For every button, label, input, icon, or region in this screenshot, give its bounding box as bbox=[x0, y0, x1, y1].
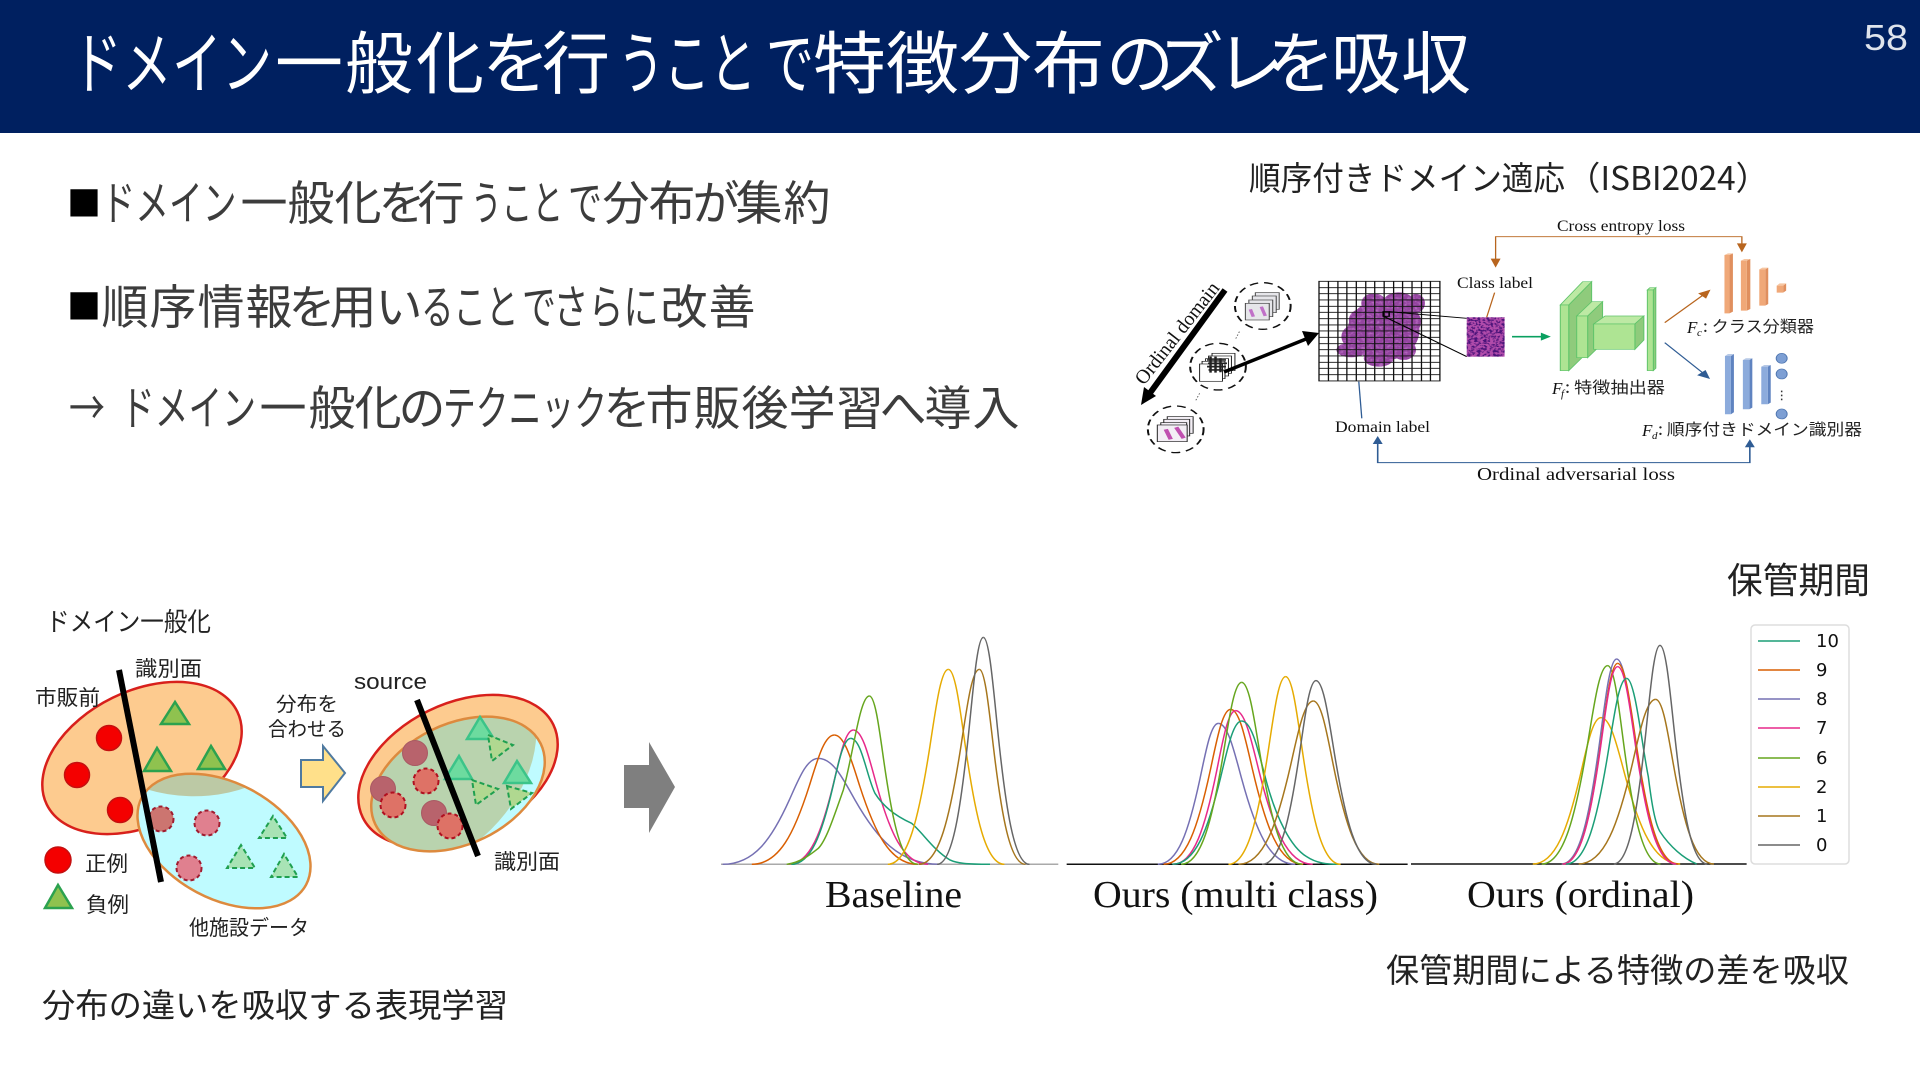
chart: Ours (ordinal) bbox=[1411, 645, 1747, 864]
diagram labels bbox=[1335, 218, 1862, 484]
bullet 2: 改善 bbox=[660, 269, 756, 338]
ordinal domain arrow: Ordinal domain bbox=[1131, 278, 1224, 389]
diagram labels: d bbox=[1652, 430, 1658, 442]
diagram labels: Cross entropy loss bbox=[1557, 218, 1685, 235]
tissue grid with patch bbox=[1319, 281, 1505, 381]
align-distributions label: 分布を bbox=[276, 688, 338, 717]
title: で bbox=[766, 9, 814, 108]
chart legend: 6 bbox=[1816, 748, 1827, 769]
after: aligned distributions bbox=[357, 694, 559, 853]
after: distribution cluster bbox=[357, 694, 559, 858]
legend: negative bbox=[45, 885, 129, 919]
chart legend: 8 bbox=[1816, 689, 1827, 710]
chart legend: 1 bbox=[1816, 806, 1827, 827]
before: labels: 市販前 bbox=[35, 682, 100, 712]
slide stacks in dashed circles bbox=[1148, 283, 1291, 453]
bullet 1: で bbox=[568, 165, 602, 234]
align-distributions label bbox=[268, 688, 346, 742]
bullet 3: 一般化の bbox=[260, 370, 446, 439]
chart label: Ours (ordinal): Ours (ordinal) bbox=[1467, 874, 1694, 916]
title: ズレを bbox=[1156, 9, 1335, 108]
after: boundary label: 識別面 bbox=[494, 846, 560, 876]
class classifier arrow and bars bbox=[1665, 253, 1786, 323]
diagram heading: （ISBI2024） bbox=[1567, 152, 1769, 200]
diagram labels: f bbox=[1561, 388, 1566, 400]
bullet 2: さらに bbox=[554, 269, 658, 338]
diagram heading: 順序付きドメイン適応 bbox=[1249, 152, 1565, 200]
bullet 2: ■ bbox=[67, 280, 101, 329]
legend: positive bbox=[45, 847, 128, 878]
diagram labels: c bbox=[1697, 327, 1702, 339]
after: decision boundary bbox=[417, 700, 478, 856]
title: の bbox=[1106, 9, 1174, 108]
chart: Ours (multi class) bbox=[1067, 677, 1408, 864]
title: 特徴分布 bbox=[813, 9, 1105, 108]
legend heading: storage period: 保管期間 bbox=[1727, 552, 1870, 604]
title: ドメイン bbox=[72, 9, 272, 108]
diagram labels: F bbox=[1641, 421, 1653, 440]
title: 一般化を行 bbox=[275, 9, 610, 108]
block arrow bbox=[301, 746, 345, 801]
bullet 2: で bbox=[522, 269, 556, 338]
feature extractor bbox=[1512, 282, 1656, 371]
bullet 3: テクニック bbox=[443, 370, 607, 439]
legend: positive: 正例 bbox=[85, 848, 128, 878]
chart: Baseline bbox=[721, 637, 1058, 864]
legend: negative: 負例 bbox=[86, 889, 129, 919]
chart legend: 10 bbox=[1816, 631, 1839, 652]
chart legend: 0 bbox=[1816, 835, 1827, 856]
caption: representation learning: 分布の違いを吸収する表現学習 bbox=[42, 979, 508, 1027]
bullet 3: ドメイン bbox=[121, 370, 256, 439]
bullet 2: 順序情報を用い bbox=[102, 269, 422, 338]
title: うこと bbox=[618, 9, 756, 108]
diagram heading: ドメイン一般化 bbox=[46, 602, 211, 639]
page number: 58 bbox=[1864, 17, 1908, 58]
bullet 1: ドメイン bbox=[102, 165, 236, 234]
before: decision boundary bbox=[119, 670, 161, 882]
input arrow bbox=[1224, 331, 1319, 372]
bullet 1: 一般化を行 bbox=[240, 165, 464, 234]
bullet 3: を市販後学習へ導入 bbox=[604, 370, 1020, 439]
bullet 3: → bbox=[69, 370, 105, 439]
chart legend: 2 bbox=[1816, 777, 1827, 798]
diagram labels: F bbox=[1551, 379, 1563, 398]
diagram labels: : 順序付きドメイン識別器 bbox=[1658, 416, 1862, 440]
before: other-site positive samples bbox=[148, 806, 220, 880]
title: 吸収 bbox=[1331, 9, 1471, 108]
before: other-site distribution ellipse bbox=[136, 772, 312, 910]
before: positive samples bbox=[64, 726, 132, 822]
before: labels: 他施設データ bbox=[189, 912, 309, 942]
diagram labels: : クラス分類器 bbox=[1703, 313, 1814, 337]
chart legend: 7 bbox=[1816, 718, 1827, 739]
before: source distribution ellipse bbox=[17, 651, 267, 865]
chart legend bbox=[1751, 625, 1849, 864]
before: other-site negative samples bbox=[227, 816, 298, 877]
chart legend: 9 bbox=[1816, 660, 1827, 681]
header bar bbox=[0, 0, 1920, 133]
after: negative samples bbox=[445, 717, 531, 783]
diagram labels: : 特徴抽出器 bbox=[1565, 374, 1665, 398]
before: labels: 識別面 bbox=[135, 653, 202, 683]
gray arrow bbox=[624, 742, 675, 833]
ordinal domain adaptation diagram bbox=[1131, 152, 1862, 484]
caption: storage period difference: 保管期間による特徴の差を吸収 bbox=[1386, 944, 1849, 992]
chart label: Ours (multi class): Ours (multi class) bbox=[1093, 874, 1378, 916]
domain discriminator arrow and bars bbox=[1665, 343, 1787, 419]
align-distributions label: 合わせる bbox=[268, 713, 346, 742]
after: other-site positive samples bbox=[380, 768, 462, 838]
cross entropy loss arrow bbox=[1487, 237, 1747, 317]
bullet 1: うこと bbox=[471, 165, 563, 234]
after: positive samples bbox=[370, 740, 446, 826]
chart label: Baseline: Baseline bbox=[825, 874, 962, 916]
bullet 1: ■ bbox=[67, 177, 101, 226]
after: other-site negative samples bbox=[472, 735, 532, 809]
domain generalization diagram bbox=[36, 608, 559, 937]
ordinal adversarial loss arrow bbox=[1359, 382, 1755, 463]
diagram labels: Ordinal adversarial loss bbox=[1477, 464, 1675, 484]
diagram labels: Domain label bbox=[1335, 419, 1431, 436]
before: negative samples bbox=[144, 702, 225, 771]
bullet 2: ること bbox=[421, 269, 518, 338]
bullet 1: 分布が集約 bbox=[602, 165, 830, 234]
before: labels bbox=[35, 653, 309, 942]
diagram labels: F bbox=[1686, 318, 1698, 337]
diagram labels: Class label bbox=[1457, 275, 1534, 292]
source label: source bbox=[354, 669, 427, 694]
bullet list bbox=[67, 165, 1020, 439]
